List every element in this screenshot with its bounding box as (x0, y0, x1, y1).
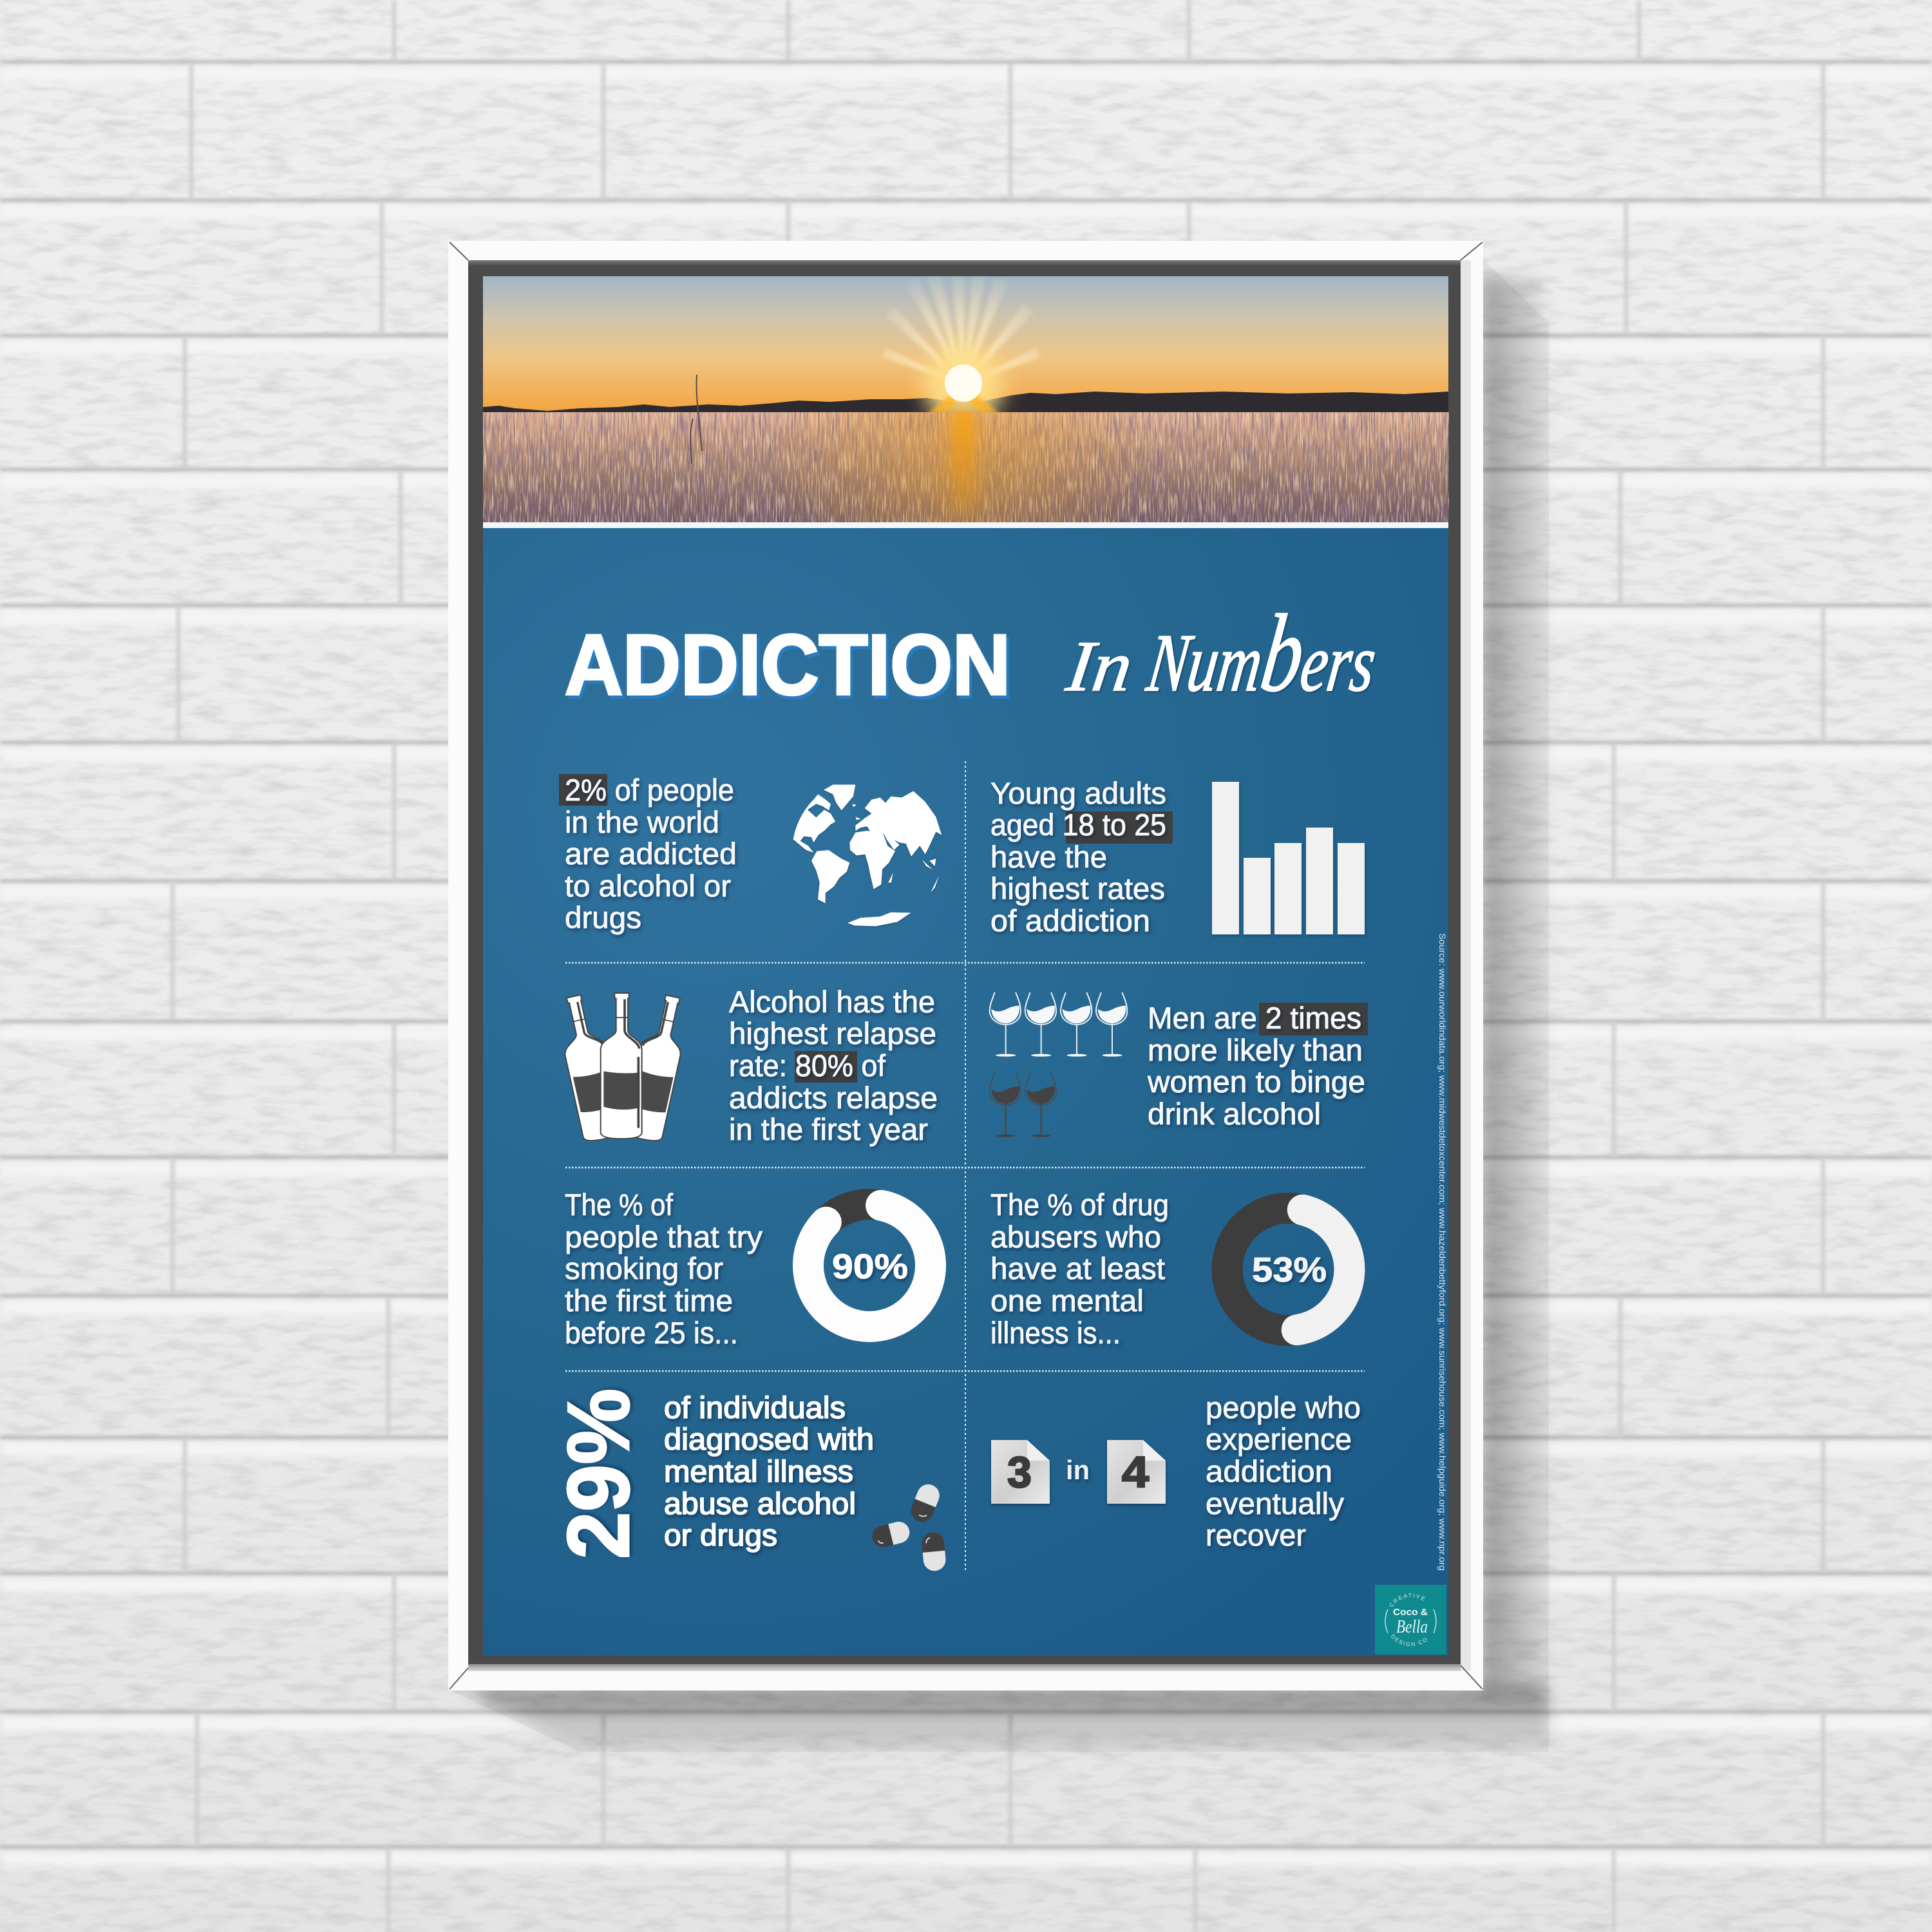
sun rays (882, 277, 1040, 384)
panel: 2% of people (559, 773, 942, 934)
icon: globe (793, 784, 942, 926)
logo: Coco and Bella: Bella (1396, 1617, 1428, 1637)
text block: mental illness (664, 1454, 853, 1488)
logo: Coco and Bella: Coco & (1393, 1607, 1428, 1618)
text block: addicts relapse (729, 1081, 938, 1115)
treeline (483, 392, 1448, 416)
icon: paper with 3 (991, 1440, 1050, 1504)
text block (1147, 1001, 1365, 1131)
text block: experience (1206, 1422, 1352, 1456)
word in: in (1066, 1455, 1090, 1485)
text block: highest relapse (729, 1016, 936, 1050)
source credit: Source: www.ourworldindata.org; www.midwestdetoxcenter.com; www.hazeldenbettyford.org; www.sunrisehouse.com; www.helpguide.org; www.npr.org (1437, 933, 1448, 1571)
text block: illness is... (990, 1316, 1121, 1350)
logo: Coco and Bella (1375, 1585, 1446, 1654)
panel: 29% mental illness (549, 1388, 947, 1572)
icon: pills (870, 1481, 947, 1572)
highlight 18 to 25 (1066, 811, 1173, 844)
icon: bar chart (1212, 782, 1365, 934)
text block: or drugs (664, 1518, 777, 1552)
text block: eventually (1206, 1486, 1345, 1520)
text block: The % of drug (990, 1188, 1169, 1222)
title: ADDICTION: ADDICTION (565, 618, 1010, 713)
text block: highest rates (990, 871, 1165, 905)
icon: paper with 4: 4 (1122, 1448, 1149, 1497)
text block (664, 1390, 874, 1552)
icon: paper with 4 (1107, 1440, 1166, 1504)
icon: paper with 3: 3 (1007, 1448, 1032, 1497)
text block: drink alcohol (1148, 1097, 1321, 1131)
panel: young adults (990, 776, 1365, 938)
donut label 90%: 90% (832, 1247, 908, 1286)
text block: smoking for (565, 1251, 723, 1285)
text block: have at least (990, 1251, 1165, 1285)
donut chart 53% (1227, 1208, 1350, 1331)
panel: alcohol relapse (553, 985, 938, 1146)
text block: of individuals (664, 1390, 846, 1425)
text block: Alcohol has the (729, 985, 935, 1019)
white picture frame (448, 241, 1483, 1690)
text block: women to binge (1147, 1065, 1365, 1099)
blue poster panel (483, 528, 1448, 1656)
icon: wine bottles (553, 992, 692, 1143)
text block: are addicted (565, 837, 737, 871)
text block: in the first year (729, 1112, 928, 1146)
text block: of addiction (990, 904, 1150, 938)
text block: 2% of people (565, 773, 734, 807)
panel: mental illness 53% (990, 1188, 1350, 1350)
text block: aged 18 to 25 (990, 808, 1166, 842)
subtitle: In Numbers (1061, 592, 1385, 715)
text block: diagnosed with (664, 1422, 874, 1456)
poster photo: sunrise over wheat field (483, 276, 1448, 523)
panel: men binge drinking (990, 993, 1368, 1137)
text block: before 25 is... (565, 1316, 738, 1350)
text block: abuse alcohol (664, 1486, 856, 1520)
text block: Young adults (990, 776, 1166, 810)
white divider under photo (483, 522, 1448, 528)
highlight 80% (795, 1051, 857, 1083)
text block: Men are 2 times (1148, 1001, 1361, 1035)
text block: more likely than (1148, 1033, 1363, 1067)
field (483, 412, 1448, 523)
sunlight on grass (766, 412, 1159, 523)
text block (565, 773, 737, 934)
grid dividers (565, 761, 1365, 1573)
frame drop shadow (451, 258, 1549, 1752)
text block: The % of (565, 1188, 674, 1222)
text block (1206, 1390, 1361, 1552)
text block: one mental (990, 1283, 1144, 1318)
text block: drugs (565, 900, 641, 934)
highlight 2% (559, 774, 607, 806)
text block: rate: 80% of (729, 1048, 886, 1083)
text block: people who (1206, 1390, 1361, 1425)
text block (990, 1188, 1169, 1350)
text block: people that try (565, 1220, 763, 1254)
logo: Coco and Bella: CREATIVE (1390, 1593, 1426, 1607)
highlight 2 times (1259, 1003, 1368, 1036)
text block: recover (1206, 1518, 1306, 1552)
tall grass stalk (690, 375, 702, 464)
donut chart 90% (808, 1204, 931, 1327)
icon: two dark wine glasses (990, 1074, 1056, 1137)
text block: to alcohol or (565, 869, 731, 903)
logo: Coco and Bella: DESIGN CO (1391, 1634, 1427, 1646)
subtitle: In Numbers: In (1061, 627, 1137, 706)
big vertical 29%: 29% (549, 1388, 647, 1559)
text block: in the world (565, 805, 719, 839)
text block: abusers who (990, 1220, 1161, 1254)
panel: smoking 90% (565, 1188, 931, 1350)
text block (990, 776, 1166, 938)
icon: four white wine glasses (990, 993, 1127, 1057)
text block: addiction (1206, 1454, 1332, 1488)
donut label 53%: 53% (1252, 1251, 1327, 1289)
panel: 3 in 4 recover (991, 1390, 1361, 1552)
text block: have the (990, 840, 1107, 874)
sky (483, 276, 1448, 414)
sun (923, 345, 1003, 424)
text block: the first time (565, 1283, 733, 1318)
subtitle: In Numbers: Numbers (1141, 592, 1385, 715)
text block (565, 1188, 763, 1350)
text block (729, 985, 938, 1146)
